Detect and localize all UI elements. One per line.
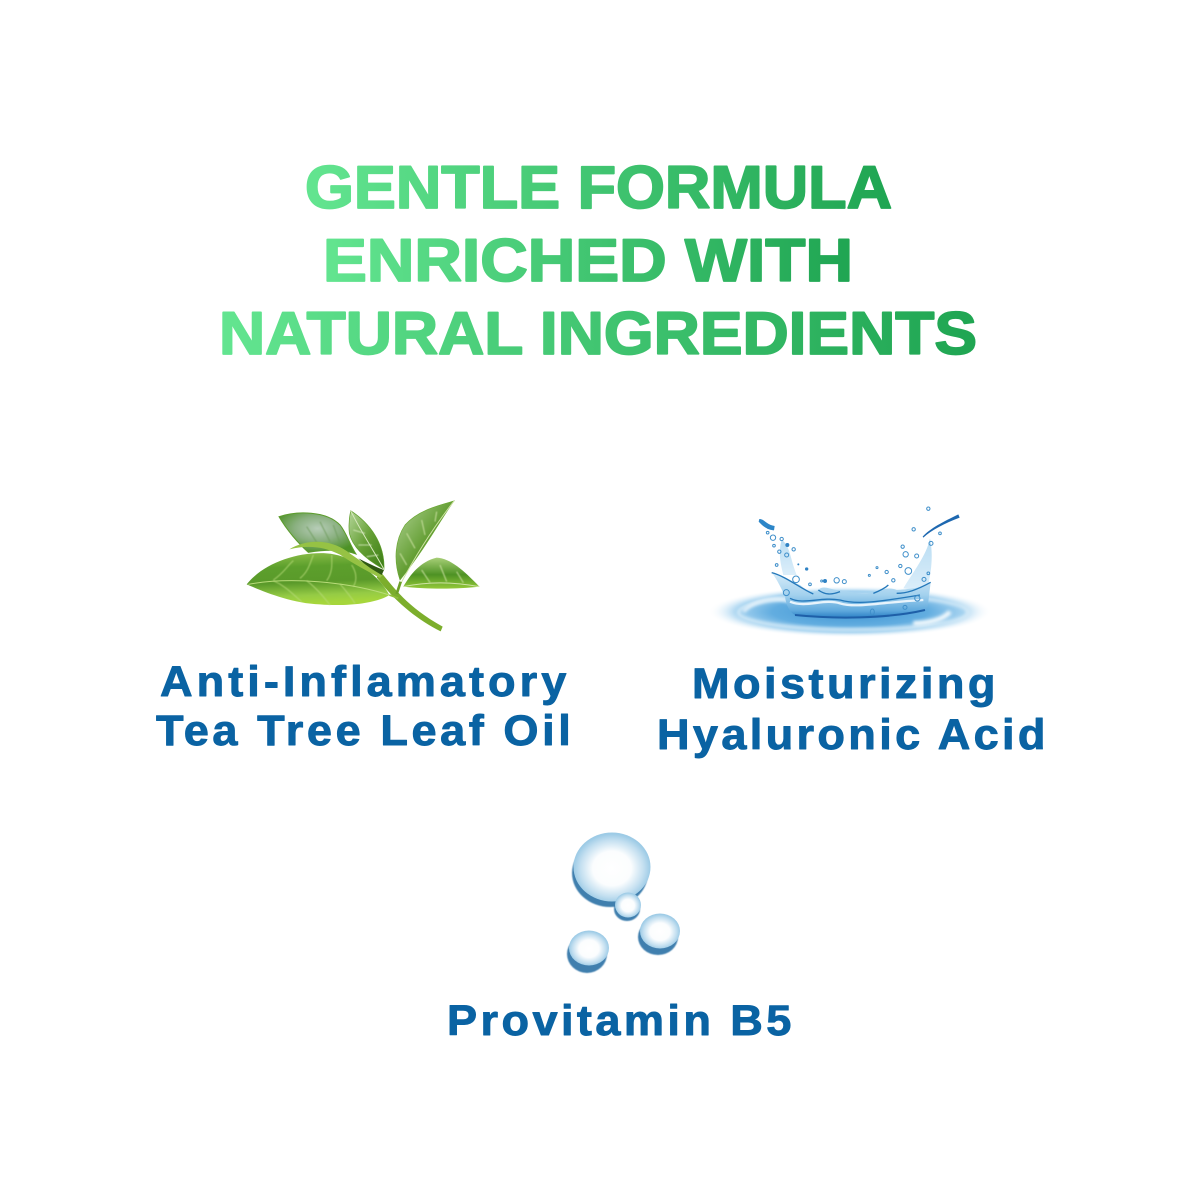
- icon: tea tree leaves: [247, 501, 479, 631]
- label: tea tree leaf oil: [156, 658, 571, 755]
- droplets: [574, 832, 650, 902]
- droplet shadows: [567, 839, 678, 973]
- icon: water droplets: [567, 832, 680, 973]
- label: tea tree leaf oil: Tea Tree Leaf Oil: [156, 707, 571, 755]
- title: GENTLE FORMULA: [305, 154, 892, 221]
- label: hyaluronic acid: Moisturizing: [692, 660, 995, 708]
- label: tea tree leaf oil: Anti-Inflamatory: [160, 658, 567, 706]
- label: provitamin b5: Provitamin B5: [447, 997, 791, 1045]
- title: NATURAL INGREDIENTS: [219, 300, 977, 367]
- label: hyaluronic acid: Hyaluronic Acid: [657, 711, 1045, 759]
- title: ENRICHED WITH: [323, 227, 853, 294]
- title: [219, 154, 977, 367]
- icon: water splash: [708, 507, 992, 638]
- label: hyaluronic acid: [657, 660, 1046, 759]
